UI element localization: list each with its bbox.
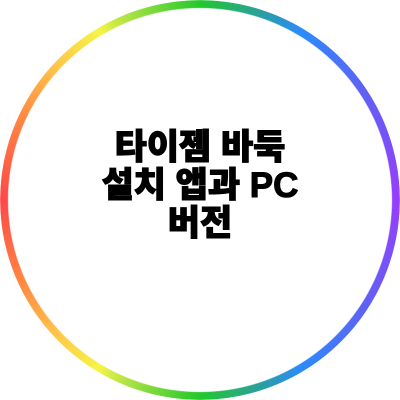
title: 설치 앱과 PC: [102, 166, 298, 205]
title: 버전: [168, 204, 232, 243]
title: 타이젬 바둑: [115, 128, 285, 167]
title: [102, 128, 298, 243]
